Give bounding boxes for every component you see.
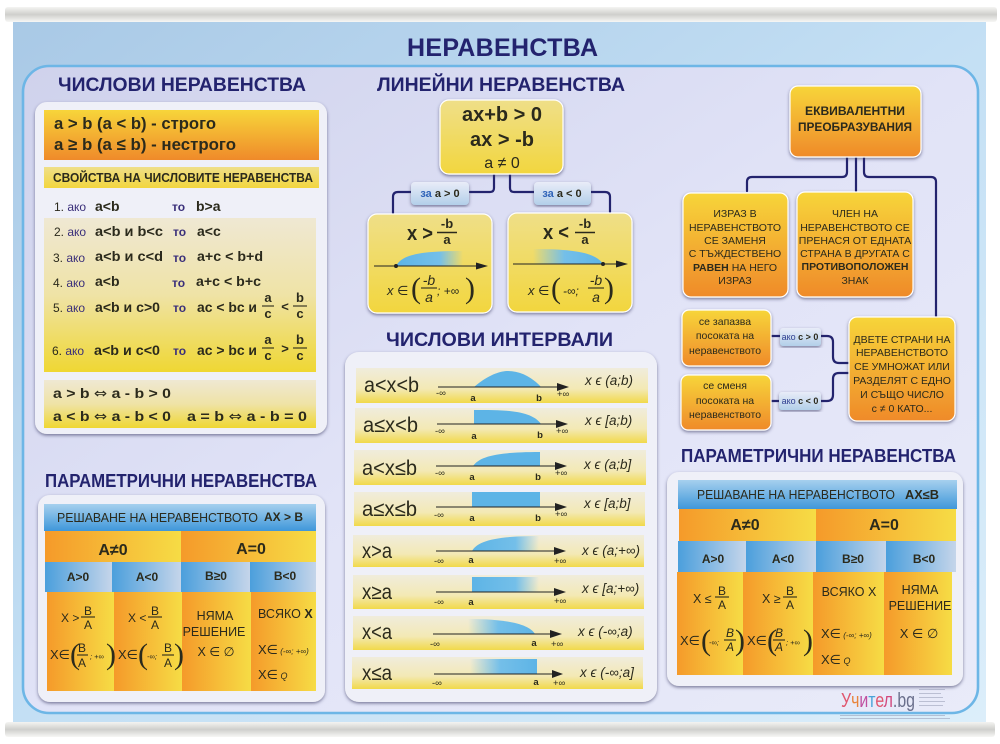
solutions row: ВСЯКО X — [258, 607, 313, 621]
box: replace expression: С ТЪЖДЕСТВЕНО — [689, 248, 781, 260]
solutions row: X∈ — [118, 647, 138, 662]
top equation box: ax > -b — [470, 129, 534, 151]
box: move term: ПРЕНАСЯ ОТ ЕДНАТА — [799, 235, 911, 247]
interval row 5: -∞ — [434, 556, 444, 567]
properties list: b — [296, 332, 304, 347]
properties list: a<b и c<0 — [94, 342, 160, 358]
solutions row: X < — [128, 611, 146, 625]
interval row 7 — [353, 616, 644, 650]
solutions row: X∈ Q — [258, 667, 288, 682]
solutions row: X ∈ ∅ — [900, 626, 938, 641]
box: replace expression: СЕ ЗАМЕНЯ — [704, 235, 766, 247]
heading: numeric inequalities: ЧИСЛОВИ НЕРАВЕНСТВА — [58, 75, 306, 96]
interval row 5 — [353, 535, 644, 567]
solutions row: A — [151, 618, 159, 632]
solutions row: B — [726, 626, 734, 640]
sub-condition row: B≥0 — [842, 552, 864, 566]
properties list: 2. ако — [54, 225, 86, 239]
box: x greater than: -b — [423, 272, 435, 288]
interval row 2: a≤x<b — [363, 414, 418, 437]
box: multiply or divide: НЕРАВЕНСТВОТО — [856, 347, 948, 359]
box: replace expression: ИЗРАЗ В — [713, 208, 757, 220]
box: x less than — [508, 213, 632, 312]
interval row 1: +∞ — [557, 389, 570, 400]
publisher logo: Учител.bg — [841, 690, 915, 712]
box: replace expression: НЕРАВЕНСТВОТО — [689, 222, 781, 234]
box: x greater than — [368, 214, 492, 313]
properties list: c — [296, 306, 304, 321]
card background — [345, 352, 657, 702]
solutions row: ВСЯКО X — [822, 585, 877, 599]
box: direction changes: посоката на — [696, 395, 754, 407]
properties list: то — [173, 301, 186, 315]
top equation box — [440, 100, 563, 174]
box: multiply or divide: И СЪЩО ЧИСЛО — [860, 389, 944, 401]
difference criteria box: a > b ⇔ a - b > 0 — [53, 385, 171, 402]
box: direction changes: се сменя — [703, 380, 747, 392]
box: x greater than: ; +∞ — [437, 284, 460, 298]
table header: AX > B — [264, 510, 303, 524]
box: x greater than: x > — [407, 223, 433, 245]
interval row 3: -∞ — [435, 468, 445, 479]
solutions row: A — [164, 656, 172, 670]
solutions row — [677, 572, 952, 675]
table header — [44, 504, 316, 531]
interval row 1: -∞ — [436, 388, 446, 399]
interval row 1 — [356, 368, 648, 404]
solutions row: НЯМА — [902, 583, 939, 597]
box: x less than: a — [592, 289, 600, 305]
properties list: то — [173, 344, 186, 358]
solutions row: ( — [701, 624, 711, 657]
solutions row: X > — [61, 611, 79, 625]
box: x less than: ( — [551, 272, 561, 305]
solutions row: X∈ (-∞; +∞) — [258, 642, 309, 657]
interval row 8: -∞ — [432, 678, 442, 689]
interval row 1: a<x<b — [364, 374, 419, 397]
box: x less than: -b — [590, 272, 602, 288]
interval row 7: x<a — [362, 621, 392, 644]
condition row — [679, 509, 956, 541]
panel: numeric inequalities — [35, 75, 327, 434]
sub-condition row: B<0 — [274, 569, 296, 583]
publisher logo — [840, 689, 950, 719]
difference criteria box: a = b ⇔ a - b = 0 — [187, 408, 307, 425]
label: c < 0: ако c < 0 — [782, 396, 818, 406]
solutions row: ( — [767, 624, 777, 657]
solutions row: НЯМА — [197, 609, 234, 623]
solutions row: X ≥ — [762, 592, 781, 606]
top equation box: ax+b > 0 — [462, 104, 542, 126]
heading: intervals: ЧИСЛОВИ ИНТЕРВАЛИ — [386, 330, 613, 351]
title box — [790, 86, 921, 157]
box: direction kept: се запазва — [699, 316, 751, 328]
interval row 6 — [353, 575, 644, 609]
solutions row: X∈ — [680, 633, 700, 648]
box: multiply or divide: РАЗДЕЛЯТ С ЕДНО — [853, 375, 951, 387]
interval row 3: b — [535, 472, 541, 483]
label: c > 0 — [780, 328, 821, 346]
interval row 4: +∞ — [555, 509, 568, 520]
solutions row: B — [775, 626, 783, 640]
label: a > 0 — [411, 182, 469, 205]
properties list: 1. ако — [54, 200, 86, 214]
panel: linear inequalities — [368, 74, 632, 313]
table header: AX≤B — [905, 488, 939, 502]
box: x greater than: x ∈ — [386, 283, 408, 298]
interval row 3: a<x≤b — [362, 457, 417, 480]
properties list: b — [296, 290, 304, 305]
condition row: A≠0 — [730, 517, 760, 534]
top roller bar — [5, 7, 997, 22]
table header: РЕШАВАНЕ НА НЕРАВЕНСТВОТО — [57, 511, 258, 525]
properties heading strip: СВОЙСТВА НА ЧИСЛОВИТЕ НЕРАВЕНСТВА — [53, 170, 313, 185]
interval row 1: a — [470, 393, 476, 404]
solutions row: ; +∞ — [90, 652, 104, 661]
box: move term: СТРАНА В ДРУГАТА С — [800, 248, 910, 260]
interval row 4: a≤x≤b — [362, 498, 417, 521]
properties list: a<b — [95, 273, 120, 289]
card background — [667, 472, 963, 686]
properties list: c — [296, 348, 304, 363]
properties list: a+c < b+d — [197, 248, 263, 264]
box: x less than: -∞; — [563, 284, 579, 298]
box: replace expression: РАВЕН НА НЕГО — [693, 262, 777, 274]
properties list: a — [264, 290, 272, 305]
strict definition box: a ≥ b (a ≤ b) - нестрого — [54, 135, 236, 154]
properties heading strip — [44, 167, 319, 188]
properties list — [44, 198, 316, 372]
solutions row: X∈ Q — [821, 652, 851, 667]
label: a < 0: за a < 0 — [542, 188, 582, 200]
strict definition box: a > b (a < b) - строго — [54, 114, 216, 133]
solutions row: РЕШЕНИЕ — [183, 625, 245, 639]
sub-condition row: B≥0 — [205, 569, 227, 583]
box: x less than: -b — [579, 216, 591, 231]
properties list: ac < bc и — [197, 299, 257, 315]
box: direction changes — [681, 375, 771, 430]
interval row 7: +∞ — [551, 639, 564, 650]
solutions row: B — [84, 604, 92, 618]
label: a < 0 — [534, 182, 591, 205]
solutions row: X∈ — [50, 647, 70, 662]
table header — [678, 480, 957, 509]
title box: ЕКВИВАЛЕНТНИ — [805, 106, 905, 118]
interval row 2: x ϵ [a;b) — [584, 413, 632, 428]
interval row 4: b — [535, 513, 541, 524]
solutions row: ) — [735, 624, 745, 657]
interval row 3: x ϵ (a;b] — [583, 457, 632, 472]
properties list: c — [264, 306, 272, 321]
properties list: ac > bc и — [197, 342, 257, 358]
properties list: a<b и b<c — [95, 223, 163, 239]
interval row 8: x≤a — [362, 662, 392, 685]
properties list: > — [281, 341, 289, 356]
interval row 3 — [354, 450, 646, 485]
sub-condition row: A>0 — [702, 552, 724, 566]
table header: РЕШАВАНЕ НА НЕРАВЕНСТВОТО — [697, 488, 895, 502]
solutions row: ) — [106, 638, 116, 671]
interval row 8: +∞ — [553, 678, 566, 689]
condition row: A=0 — [236, 541, 266, 558]
solutions row: X∈ (-∞; +∞) — [821, 626, 872, 641]
sub-condition row — [678, 541, 956, 572]
box: direction kept: неравенството — [689, 345, 761, 357]
solutions row: ( — [138, 638, 148, 671]
properties list: c — [264, 348, 272, 363]
solutions row: ; +∞ — [786, 638, 800, 647]
properties list: то — [172, 200, 185, 214]
solutions row: ) — [803, 624, 813, 657]
sub-condition row — [45, 562, 316, 592]
solutions row: A — [774, 640, 783, 654]
solutions row: -∞; — [709, 638, 719, 647]
interval row 6: +∞ — [554, 596, 567, 607]
interval row 5: x>a — [362, 540, 392, 563]
interval row 5: a — [468, 555, 474, 566]
solutions row: B — [718, 584, 726, 598]
solutions row: B — [78, 641, 86, 655]
condition row: A=0 — [869, 517, 899, 534]
panel: equivalent transformations — [681, 86, 955, 430]
box: direction changes: неравенството — [689, 409, 761, 421]
box: multiply or divide: ДВЕТЕ СТРАНИ НА — [853, 334, 951, 346]
label: c < 0 — [779, 392, 821, 410]
interval row 7: a — [531, 638, 537, 649]
interval row 3: a — [469, 472, 475, 483]
interval row 7: -∞ — [430, 639, 440, 650]
interval row 4: x ϵ [a;b] — [583, 496, 632, 511]
interval row 7: x ϵ (-∞;a) — [577, 624, 633, 639]
solutions row: X ≤ — [693, 592, 712, 606]
properties list: a<b — [95, 198, 120, 214]
properties list: a<c — [197, 223, 221, 239]
interval row 1: b — [536, 393, 542, 404]
label: a > 0: за a > 0 — [420, 188, 460, 200]
box: x less than: x ∈ — [527, 283, 549, 298]
sub-condition row: A>0 — [67, 570, 89, 584]
panel: parametric inequalities right — [667, 446, 963, 686]
solutions row: X∈ — [747, 633, 767, 648]
properties list: то — [172, 276, 185, 290]
interval row 6: -∞ — [434, 597, 444, 608]
interval row 4 — [354, 492, 645, 526]
box: multiply or divide — [849, 317, 955, 421]
heading: linear: ЛИНЕЙНИ НЕРАВЕНСТВА — [377, 74, 625, 96]
interval row 2 — [355, 408, 647, 443]
box: direction kept: посоката на — [696, 330, 754, 342]
solutions row: РЕШЕНИЕ — [889, 599, 951, 613]
box: x less than: ) — [604, 272, 614, 305]
properties list: 5. ако — [53, 301, 85, 315]
card background — [35, 102, 327, 434]
interval row 5: x ϵ (a;+∞) — [581, 543, 640, 558]
properties list: 6. ако — [52, 344, 84, 358]
interval row 8 — [352, 657, 643, 689]
solutions row: A — [84, 618, 92, 632]
main title: НЕРАВЕНСТВА — [407, 34, 598, 62]
interval row 1: x ϵ (a;b) — [584, 373, 633, 388]
properties list: b>a — [196, 198, 221, 214]
box: x less than: x < — [543, 222, 569, 244]
solutions row: A — [78, 656, 86, 670]
box: multiply or divide: СЕ УМНОЖАТ ИЛИ — [854, 361, 950, 373]
interval row 3: +∞ — [555, 468, 568, 479]
box: replace expression: ИЗРАЗ — [718, 275, 752, 287]
connector lines — [747, 157, 936, 401]
interval row 2: -∞ — [435, 426, 445, 437]
difference criteria box — [44, 380, 316, 428]
solutions row: B — [786, 584, 794, 598]
box: x greater than: a — [443, 232, 451, 247]
interval row 4: -∞ — [434, 510, 444, 521]
properties list: то — [173, 225, 186, 239]
title box: ПРЕОБРАЗУВАНИЯ — [798, 122, 912, 134]
heading: parametric right: ПАРАМЕТРИЧНИ НЕРАВЕНСТВА — [681, 446, 956, 466]
solutions row: -∞; — [147, 652, 157, 661]
box: x greater than: ( — [411, 272, 421, 305]
interval row 8: x ϵ (-∞;a] — [579, 665, 635, 680]
interval row 5: +∞ — [554, 556, 567, 567]
solutions row: ( — [70, 638, 80, 671]
card background — [38, 495, 325, 702]
heading: parametric left: ПАРАМЕТРИЧНИ НЕРАВЕНСТВА — [45, 471, 317, 491]
properties list: a<b и c<d — [95, 248, 163, 264]
interval row 6: x ϵ [a;+∞) — [581, 581, 639, 596]
panel: number intervals — [345, 330, 657, 702]
label: c > 0: ако c > 0 — [782, 332, 818, 342]
sub-condition row: B<0 — [913, 552, 935, 566]
box: move term: ЧЛЕН НА — [832, 208, 878, 220]
interval row 8: a — [533, 677, 539, 688]
box: x greater than: a — [425, 289, 433, 305]
interval row 4: a — [469, 513, 475, 524]
properties list: 4. ако — [53, 276, 85, 290]
interval row 6: x≥a — [362, 581, 392, 604]
condition row — [45, 531, 316, 562]
box: x less than: a — [581, 232, 589, 247]
top equation box: a ≠ 0 — [484, 155, 520, 172]
sub-condition row: A<0 — [136, 570, 158, 584]
solutions row: B — [151, 604, 159, 618]
box: move term: НЕРАВЕНСТВОТО СЕ — [800, 222, 910, 234]
box: move term: ПРОТИВОПОЛОЖЕН — [802, 261, 908, 273]
strict definition box — [44, 110, 319, 160]
box: replace expression — [683, 193, 788, 297]
box: direction kept — [682, 310, 771, 366]
box: x greater than: -b — [441, 216, 453, 231]
solutions row: A — [718, 598, 726, 612]
bottom roller bar — [5, 722, 995, 737]
solutions row: A — [786, 598, 794, 612]
connector lines — [393, 174, 610, 213]
solutions row: ) — [174, 638, 184, 671]
solutions row: X ∈ ∅ — [197, 645, 235, 659]
solutions row — [47, 592, 316, 691]
panel: parametric inequalities left — [38, 471, 325, 702]
properties list: < — [281, 299, 289, 314]
interval row 6: a — [468, 597, 474, 608]
interval row 2: b — [537, 430, 543, 441]
condition row: A≠0 — [98, 542, 128, 559]
interval row 2: a — [471, 431, 477, 442]
difference criteria box: a < b ⇔ a - b < 0 — [53, 408, 171, 425]
sub-condition row: A<0 — [772, 552, 794, 566]
box: move term: ЗНАК — [841, 275, 869, 287]
solutions row: B — [164, 641, 172, 655]
box: multiply or divide: с ≠ 0 КАТО... — [872, 403, 932, 415]
solutions row: A — [725, 640, 734, 654]
interval row 2: +∞ — [556, 426, 569, 437]
properties list: a+c < b+c — [196, 273, 261, 289]
properties list: 3. ако — [53, 251, 85, 265]
properties list: a<b и c>0 — [95, 299, 160, 315]
properties list: то — [173, 251, 186, 265]
properties list: a — [264, 332, 272, 347]
box: x greater than: ) — [465, 272, 475, 305]
box: move term — [797, 192, 913, 297]
